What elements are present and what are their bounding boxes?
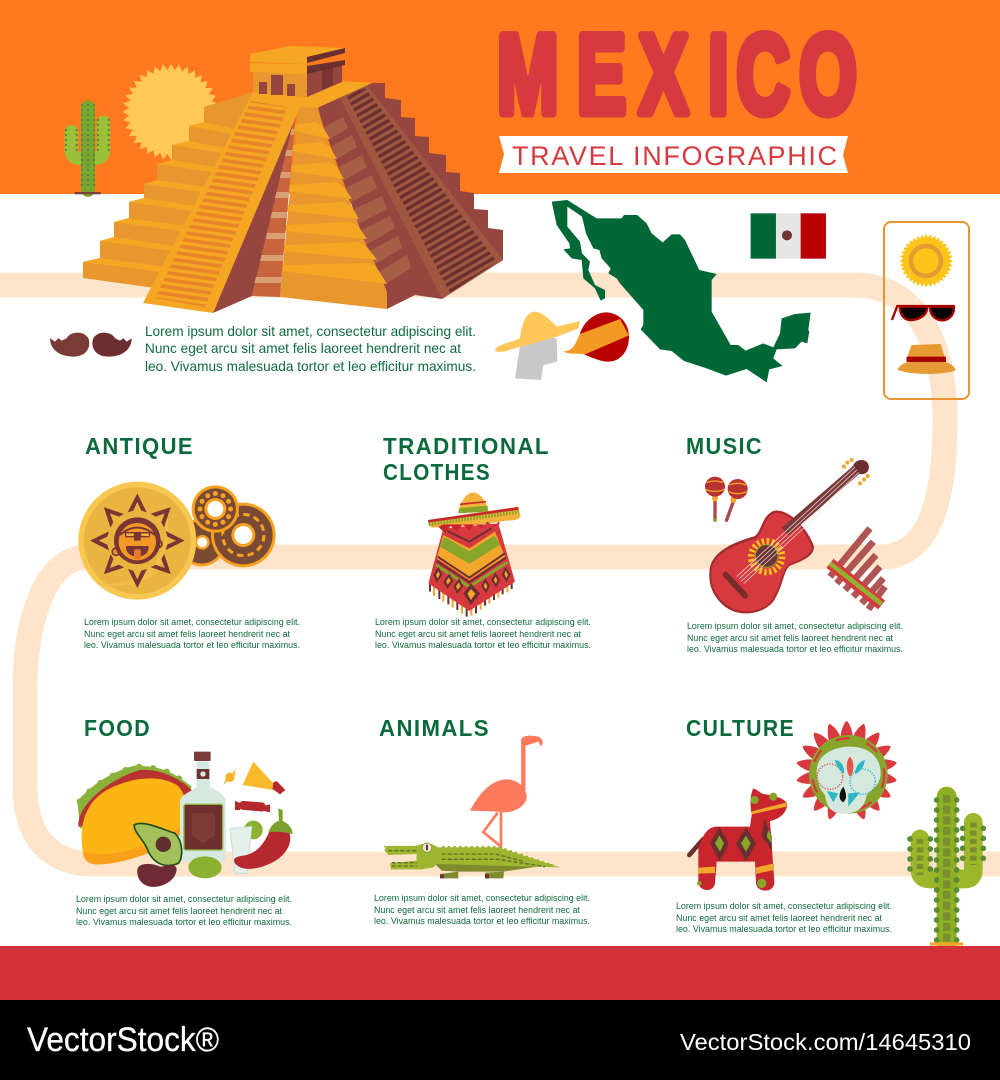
sombrero brim — [428, 507, 521, 528]
temple doors — [259, 75, 295, 96]
subtitle: TRAVEL INFOGRAPHIC — [512, 141, 837, 171]
poncho chevrons — [436, 528, 507, 587]
text: animals: Nunc eget arcu sit amet felis laoreet hendrerit nec at — [374, 905, 580, 915]
intro text — [145, 323, 476, 374]
skull face — [817, 747, 881, 814]
text: traditional clothes: leo. Vivamus malesuada tortor et leo efficitur maximus. — [375, 640, 591, 650]
temple roof — [250, 46, 345, 64]
platform — [250, 81, 372, 108]
central strip bands — [254, 129, 294, 283]
icon: shot glass — [230, 821, 263, 873]
text: food — [76, 894, 292, 927]
text: traditional clothes: Nunc eget arcu sit amet felis laoreet hendrerit nec at — [375, 629, 581, 639]
poncho body — [428, 523, 515, 611]
text: culture: leo. Vivamus malesuada tortor et leo efficitur maximus. — [676, 924, 892, 934]
icon: flag — [751, 213, 826, 259]
shaded triangle beside stairs — [213, 107, 298, 313]
guitar bridge — [726, 575, 745, 596]
guitar pegs — [842, 458, 870, 485]
pyramid right side — [317, 83, 503, 309]
watermark url: VectorStock.com/14645310 — [680, 1029, 971, 1055]
icon: large cactus — [910, 795, 983, 946]
heading: food: FOOD — [84, 715, 151, 741]
icon: head with hat — [495, 312, 580, 380]
heading: animals: ANIMALS — [379, 715, 490, 741]
central red strip — [252, 110, 296, 297]
icon: donuts — [178, 485, 276, 567]
text: antique: leo. Vivamus malesuada tortor et leo efficitur maximus. — [84, 640, 300, 650]
icon: pan pipes — [830, 528, 885, 609]
pyramid left steps — [83, 92, 260, 288]
watermark logo: VectorStock® — [27, 1021, 219, 1059]
poncho diamonds — [433, 567, 511, 605]
subtitle banner — [499, 136, 848, 173]
heading: culture: CULTURE — [686, 715, 795, 741]
text: food: leo. Vivamus malesuada tortor et leo efficitur maximus. — [76, 917, 292, 927]
text: music: leo. Vivamus malesuada tortor et leo efficitur maximus. — [687, 644, 903, 654]
panel: travel items — [884, 222, 969, 399]
skull petals — [796, 721, 898, 821]
text: animals: Lorem ipsum dolor sit amet, consectetur adipiscing elit. — [374, 893, 590, 903]
intro text: Nunc eget arcu sit amet felis laoreet hendrerit nec at — [145, 340, 461, 356]
pyramid — [83, 46, 503, 313]
pyramid right side steps — [325, 117, 411, 286]
icon: guitar — [709, 458, 870, 613]
footer band — [0, 946, 1000, 1000]
text: music: Nunc eget arcu sit amet felis laoreet hendrerit nec at — [687, 633, 893, 643]
icon: aztec sun disc — [78, 482, 196, 600]
text: traditional clothes — [375, 617, 591, 650]
guitar rosette — [751, 541, 782, 572]
left staircase — [143, 92, 300, 313]
text: culture — [676, 901, 892, 934]
icon: candy — [223, 769, 270, 812]
map of Mexico — [552, 200, 811, 382]
front step highlights — [281, 122, 387, 284]
text: animals — [374, 893, 590, 926]
poncho tassels — [430, 581, 512, 617]
aztec face — [112, 517, 162, 564]
header band — [0, 0, 1000, 194]
sombrero crown — [458, 492, 488, 512]
title: MEXICO — [497, 13, 857, 138]
heading: music: MUSIC — [686, 433, 763, 459]
icon: maracas — [705, 477, 748, 522]
icon: taco — [77, 765, 192, 864]
pinata diamonds — [710, 819, 772, 862]
pinata stripes — [698, 802, 787, 874]
temple side wall — [307, 63, 342, 97]
right staircase slats — [346, 88, 497, 293]
text: food: Lorem ipsum dolor sit amet, consectetur adipiscing elit. — [76, 894, 292, 904]
route path — [0, 285, 1000, 864]
sun rays — [90, 493, 185, 588]
left staircase slats — [155, 101, 288, 307]
text: antique: Nunc eget arcu sit amet felis laoreet hendrerit nec at — [84, 629, 290, 639]
intro text: leo. Vivamus malesuada tortor et leo efficitur maximus. — [145, 358, 476, 374]
icon: chili — [234, 808, 293, 869]
intro text: Lorem ipsum dolor sit amet, consectetur adipiscing elit. — [145, 323, 476, 339]
heading: traditional clothes: TRADITIONAL — [383, 433, 550, 459]
heading: traditional clothes: CLOTHES — [383, 459, 491, 485]
heading: antique: ANTIQUE — [85, 433, 194, 459]
text: traditional clothes: Lorem ipsum dolor sit amet, consectetur adipiscing elit. — [375, 617, 591, 627]
text: culture: Lorem ipsum dolor sit amet, consectetur adipiscing elit. — [676, 901, 892, 911]
icon: small cactus — [66, 105, 109, 194]
heading: traditional clothes — [383, 433, 550, 485]
text: antique: Lorem ipsum dolor sit amet, consectetur adipiscing elit. — [84, 617, 300, 627]
icon: mustache — [50, 333, 132, 357]
icon: avocado — [134, 823, 182, 866]
guitar neck — [785, 467, 860, 532]
text: antique — [84, 617, 300, 650]
icon: flamingo — [470, 736, 543, 848]
watermark bar — [0, 1000, 1000, 1080]
icon: lime — [188, 856, 222, 878]
icon: poncho with sombrero — [428, 492, 521, 617]
icon: sun badge — [900, 226, 961, 292]
icon: sun — [123, 48, 235, 168]
icon: balloon — [563, 312, 629, 362]
pyramid right staircase — [340, 85, 503, 299]
temple front — [253, 72, 307, 97]
text: music — [687, 621, 903, 654]
icon: tequila bottle — [180, 752, 226, 862]
guitar head — [853, 460, 869, 474]
pyramid front right steps — [280, 107, 387, 309]
left step highlights — [83, 122, 235, 272]
text: food: Nunc eget arcu sit amet felis laoreet hendrerit nec at — [76, 906, 282, 916]
icon: hat — [897, 344, 956, 374]
icon: cheese wedge — [243, 762, 285, 794]
icon: pinata — [689, 788, 787, 891]
guitar strings — [737, 464, 865, 584]
icon: sunglasses — [892, 306, 955, 320]
icon: sugar skull — [796, 721, 898, 821]
text: animals: leo. Vivamus malesuada tortor et leo efficitur maximus. — [374, 916, 590, 926]
text: music: Lorem ipsum dolor sit amet, consectetur adipiscing elit. — [687, 621, 903, 631]
temple cornice — [250, 63, 307, 74]
icon: bean — [137, 864, 177, 887]
text: culture: Nunc eget arcu sit amet felis laoreet hendrerit nec at — [676, 913, 882, 923]
icon: crocodile — [384, 843, 560, 878]
